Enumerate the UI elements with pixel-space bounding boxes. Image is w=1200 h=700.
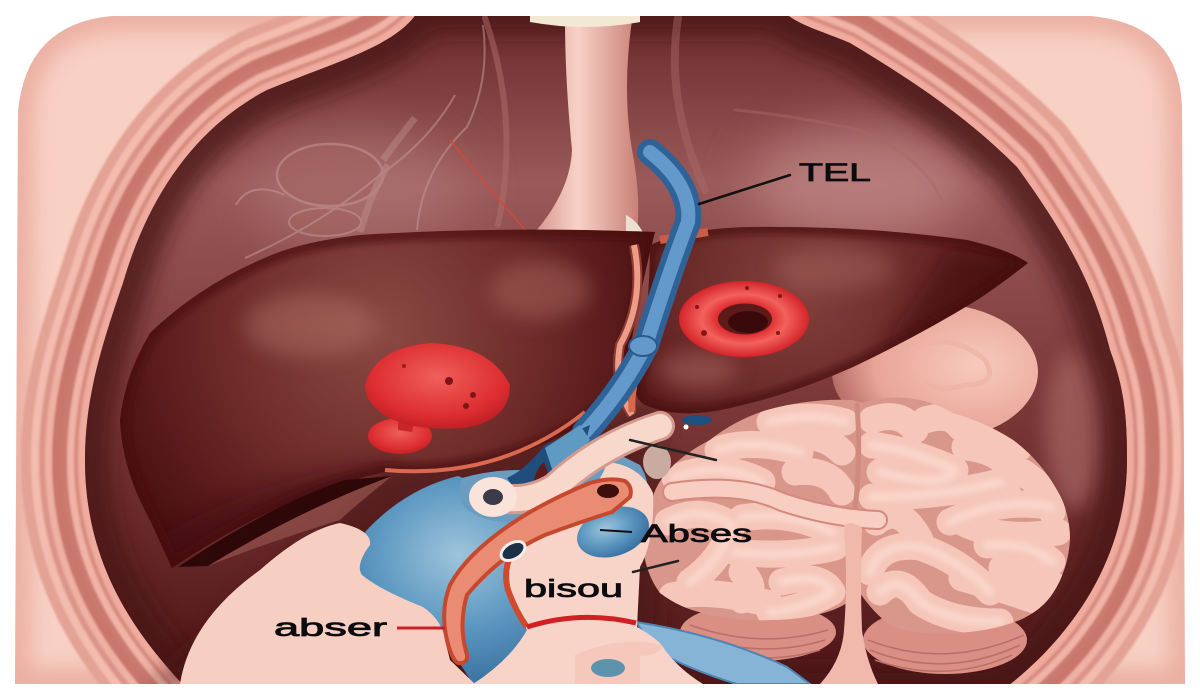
central stalk [820, 523, 878, 684]
pointer: duct [630, 440, 716, 460]
dark slit [178, 476, 392, 567]
gyri base [668, 417, 1058, 622]
label: Abses: Abses [641, 520, 752, 548]
bile duct [498, 426, 660, 499]
blue nodule [577, 506, 649, 558]
label: abser: abser [274, 614, 387, 642]
soft folds [482, 16, 827, 228]
cerebellum lobes [680, 612, 1027, 674]
pale lobe beneath fold [208, 476, 392, 566]
esophagus [528, 16, 646, 240]
liver lower rim [385, 412, 585, 471]
gyri highlights [668, 417, 1052, 622]
nodule and vessel beside duct [643, 415, 712, 479]
vein junction [629, 336, 657, 356]
duct opening [469, 477, 517, 517]
brain-like convoluted mass [643, 398, 1070, 684]
pale pink body [473, 462, 703, 684]
label: TEL [699, 159, 871, 204]
label: bisou: bisou [524, 575, 623, 603]
label: bisou [524, 561, 678, 603]
pale tissue around duct [460, 457, 648, 522]
lesion: left liver [365, 343, 510, 454]
midline [853, 402, 862, 508]
pale left stomach [180, 523, 475, 684]
ligament bands [618, 232, 708, 415]
dark space behind organs [150, 400, 660, 684]
orange artery [444, 479, 631, 663]
pink organ behind brain [832, 307, 1038, 428]
bottom blue vessel [636, 622, 810, 684]
tissue lip at bottom [575, 642, 662, 684]
label: TEL: TEL [799, 159, 871, 187]
red branch vessel [503, 562, 636, 630]
right liver lobe [635, 227, 1030, 413]
lesion: right liver [679, 281, 809, 357]
blue lobe [360, 476, 527, 684]
blue vein [585, 152, 688, 432]
faint membrane rings [236, 25, 485, 258]
left liver lobe [120, 230, 655, 600]
dark blue recess [507, 425, 590, 490]
thin red vessel [450, 140, 527, 232]
